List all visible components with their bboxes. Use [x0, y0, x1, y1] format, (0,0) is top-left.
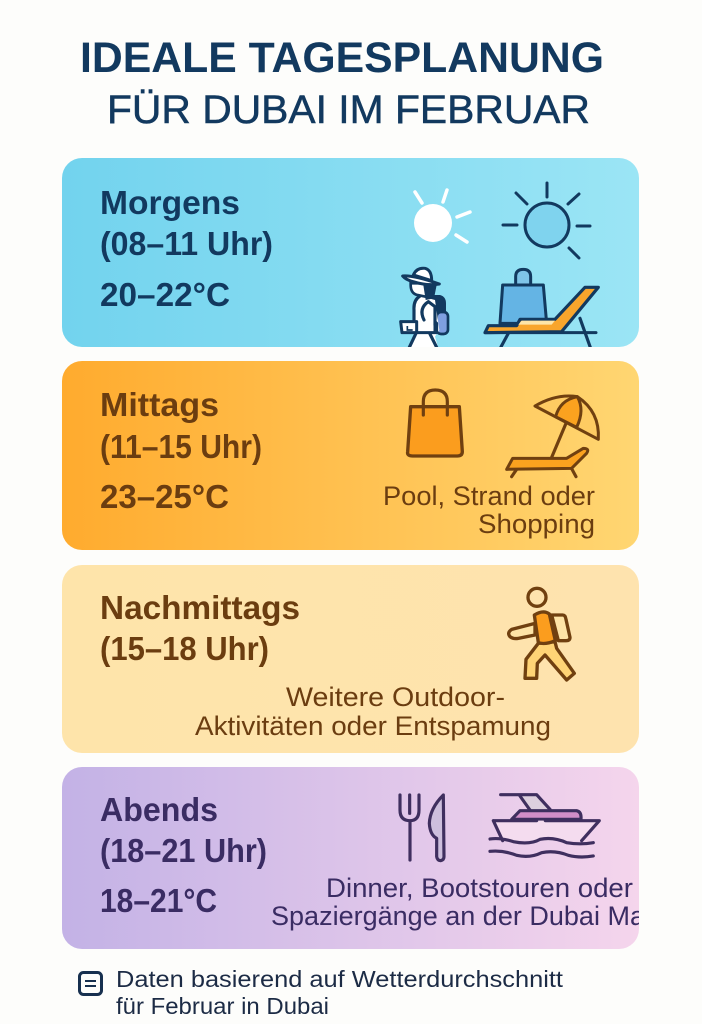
- panel: Mittags: [62, 361, 639, 550]
- activity text: Abends: [272, 878, 639, 930]
- heading: Morgens: (08–11 Uhr): [100, 225, 273, 262]
- heading: Morgens: [100, 184, 273, 313]
- heading: Abends: 18–21°C: [100, 882, 217, 919]
- icon: traveller: [401, 268, 448, 352]
- heading: Abends: [100, 791, 267, 919]
- footer note: [116, 966, 563, 1019]
- title: FÜR DUBAI IM FEBRUAR: [107, 88, 590, 132]
- icon: outlined sun: [503, 183, 590, 258]
- panel: Morgens: [62, 158, 639, 352]
- heading: Nachmittags: Nachmittags: [100, 589, 300, 626]
- heading: Abends: Abends: [100, 791, 218, 828]
- activity text: Mittags: [383, 481, 595, 539]
- heading: Nachmittags: [100, 589, 300, 667]
- title: IDEALE TAGESPLANUNG: [80, 34, 604, 82]
- activity text: Abends: Spaziergänge an der Dubai Ma: [271, 901, 646, 931]
- icon: fork and knife: [400, 795, 444, 861]
- heading: Mittags: Mittags: [100, 386, 219, 423]
- activity text: Mittags: Shopping: [478, 509, 595, 539]
- heading: Nachmittags: (15–18 Uhr): [100, 630, 269, 667]
- activity text: Abends: Dinner, Bootstouren oder: [326, 873, 633, 903]
- heading: Mittags: 23–25°C: [100, 478, 229, 515]
- panel: Abends: [62, 767, 646, 949]
- panel: Nachmittags: [62, 565, 639, 753]
- heading: Abends: (18–21 Uhr): [100, 832, 267, 869]
- activity text: Mittags: Pool, Strand oder: [383, 481, 595, 511]
- activity text: Nachmittags: Aktivitäten oder Entspamung: [195, 711, 551, 741]
- title: [80, 34, 604, 132]
- heading: Morgens: Morgens: [100, 184, 240, 221]
- icon: shopping bag: [408, 390, 462, 456]
- activity text: Nachmittags: [195, 682, 551, 741]
- heading: Morgens: 20–22°C: [100, 276, 230, 313]
- footer note: Daten basierend auf Wetterdurchschnitt: [116, 966, 563, 992]
- icon: hiker: [509, 588, 574, 680]
- icon: boat: [490, 795, 599, 857]
- icon: shopping bag and lounger: [485, 269, 598, 350]
- activity text: Nachmittags: Weitere Outdoor-: [286, 682, 505, 712]
- icon: white sun: [414, 190, 470, 242]
- heading: Mittags: (11–15 Uhr): [100, 428, 262, 465]
- heading: Mittags: [100, 386, 262, 515]
- footer note: für Februar in Dubai: [116, 993, 329, 1019]
- footer note icon: [80, 972, 102, 994]
- icon: beach umbrella and lounger: [507, 396, 598, 477]
